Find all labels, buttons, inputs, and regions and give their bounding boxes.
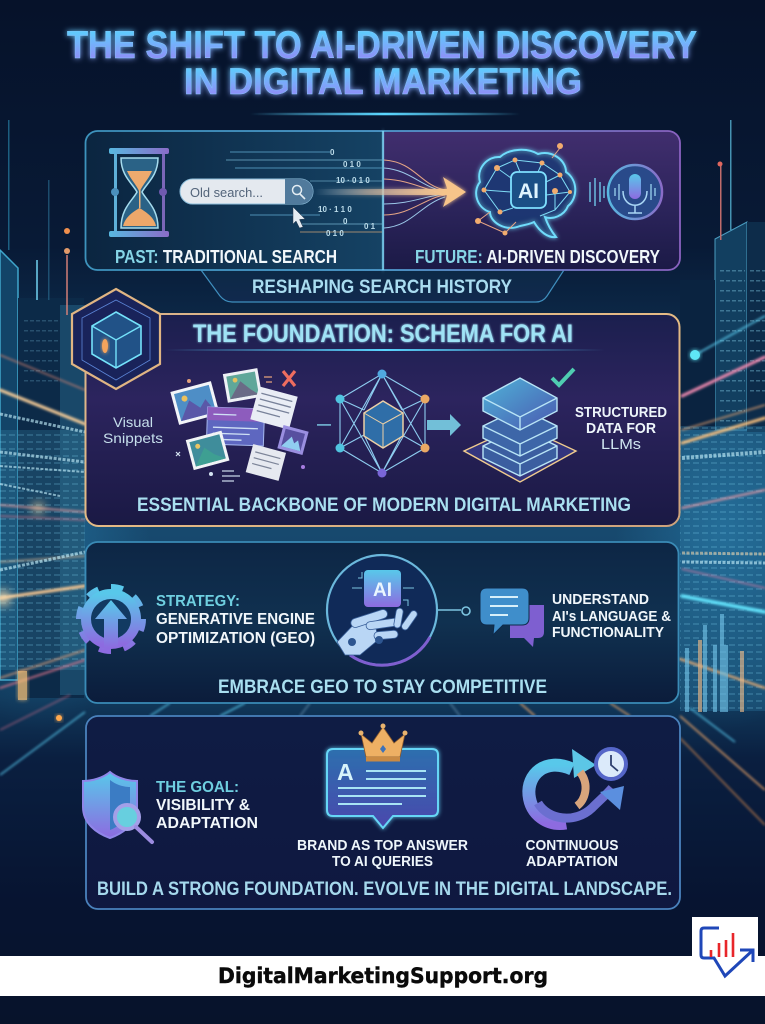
title: IN DIGITAL MARKETING [184,61,582,102]
icon: chat bubbles [480,588,544,647]
binary digits: 0 1 0 [343,160,361,169]
icon: hourglass [109,148,169,237]
icon: AI brain: AI [518,180,539,203]
icon: snippet collage [170,368,309,481]
caption: BUILD A STRONG FOUNDATION. EVOLVE IN THE DIGITAL LANDSCAPE. [97,879,672,900]
caption: ESSENTIAL BACKBONE OF MODERN DIGITAL MARKETING [137,494,631,516]
strategy text: OPTIMIZATION (GEO) [156,630,315,647]
binary digits: 0 1 [364,222,376,231]
side data strips [0,414,765,570]
understand text: AI's LANGUAGE & [552,608,671,625]
search bar: Old search: Old search... [190,185,263,200]
understand text: UNDERSTAND [552,591,649,608]
label: visual snippets: Visual [113,414,153,430]
binary digits [318,148,376,238]
icon: structured data stack [464,369,576,482]
connector [438,607,470,615]
understand text [552,591,671,641]
label: brand as top answer: TO AI QUERIES [332,854,433,870]
panel background [86,542,678,703]
icon: hexagon cube badge [72,289,160,389]
label: visual snippets [103,414,163,446]
panel background [86,314,680,526]
icon: AI robot hand: AI [373,580,392,601]
icon: schema network [336,370,430,478]
data streams [226,152,445,232]
footer band: DigitalMarketingSupport.org [218,964,548,989]
icon: AI robot hand [327,555,437,665]
panel: strategy GEO [80,542,678,703]
panel: the foundation [72,289,680,526]
search bar: Old search [180,179,313,204]
goal text: ADAPTATION [156,815,258,832]
arrow: schema to data [427,414,461,436]
binary digits: 0 [330,148,335,157]
icon: AI brain [475,143,575,237]
perspective floor lines [0,695,765,825]
right buildings [680,120,765,711]
strategy text: GENERATIVE ENGINE [156,611,315,628]
panel background [85,131,680,270]
icon: continuous adaptation [529,749,626,823]
footer band [0,956,765,996]
understand text: FUNCTIONALITY [552,624,664,641]
right bar chart [685,614,744,712]
goal text: THE GOAL: [156,779,239,796]
label: structured data: LLMs [601,437,641,453]
goal text [156,779,258,832]
binary digits: 10 · 0 1 0 [336,176,370,185]
label: structured data [575,405,667,453]
label: continuous adaptation: CONTINUOUS [526,838,619,854]
left buildings [0,120,85,698]
label: brand as top answer: BRAND AS TOP ANSWER [297,838,468,854]
logo [692,917,758,996]
title [67,24,697,102]
reshaping tab [201,270,564,302]
panel: the goal [83,716,680,909]
label: brand as top answer [297,838,468,870]
icon: shield with magnifier [83,772,152,842]
panel background [86,716,680,909]
panel: past vs future search [85,131,680,302]
binary digits: 10 · 1 1 0 [318,205,352,214]
icon: answer card with crown: A [337,759,354,785]
icon: answer card with crown [327,724,438,828]
binary digits: 0 [343,217,348,226]
label: visual snippets: Snippets [103,430,163,446]
label: structured data: DATA FOR [586,421,657,437]
label: structured data: STRUCTURED [575,405,667,421]
label: continuous adaptation: ADAPTATION [526,854,618,870]
arrow: past to future [315,177,466,207]
label: continuous adaptation [526,838,619,870]
label: future: FUTURE: AI-DRIVEN DISCOVERY [415,247,660,267]
strategy text [156,593,315,647]
icon: cursor [293,207,305,228]
goal text: VISIBILITY & [156,797,250,814]
binary digits: 0 1 0 [326,229,344,238]
heading: THE FOUNDATION: SCHEMA FOR AI [193,320,573,348]
caption: EMBRACE GEO TO STAY COMPETITIVE [218,676,547,698]
icon: microphone [590,165,662,219]
title: THE SHIFT TO AI-DRIVEN DISCOVERY [67,24,697,67]
light streaks [0,316,765,688]
icon: gear with arrow [80,588,142,650]
strategy text: STRATEGY: [156,593,240,610]
reshaping tab: RESHAPING SEARCH HISTORY [252,277,512,298]
label: past: PAST: TRADITIONAL SEARCH [115,247,337,267]
